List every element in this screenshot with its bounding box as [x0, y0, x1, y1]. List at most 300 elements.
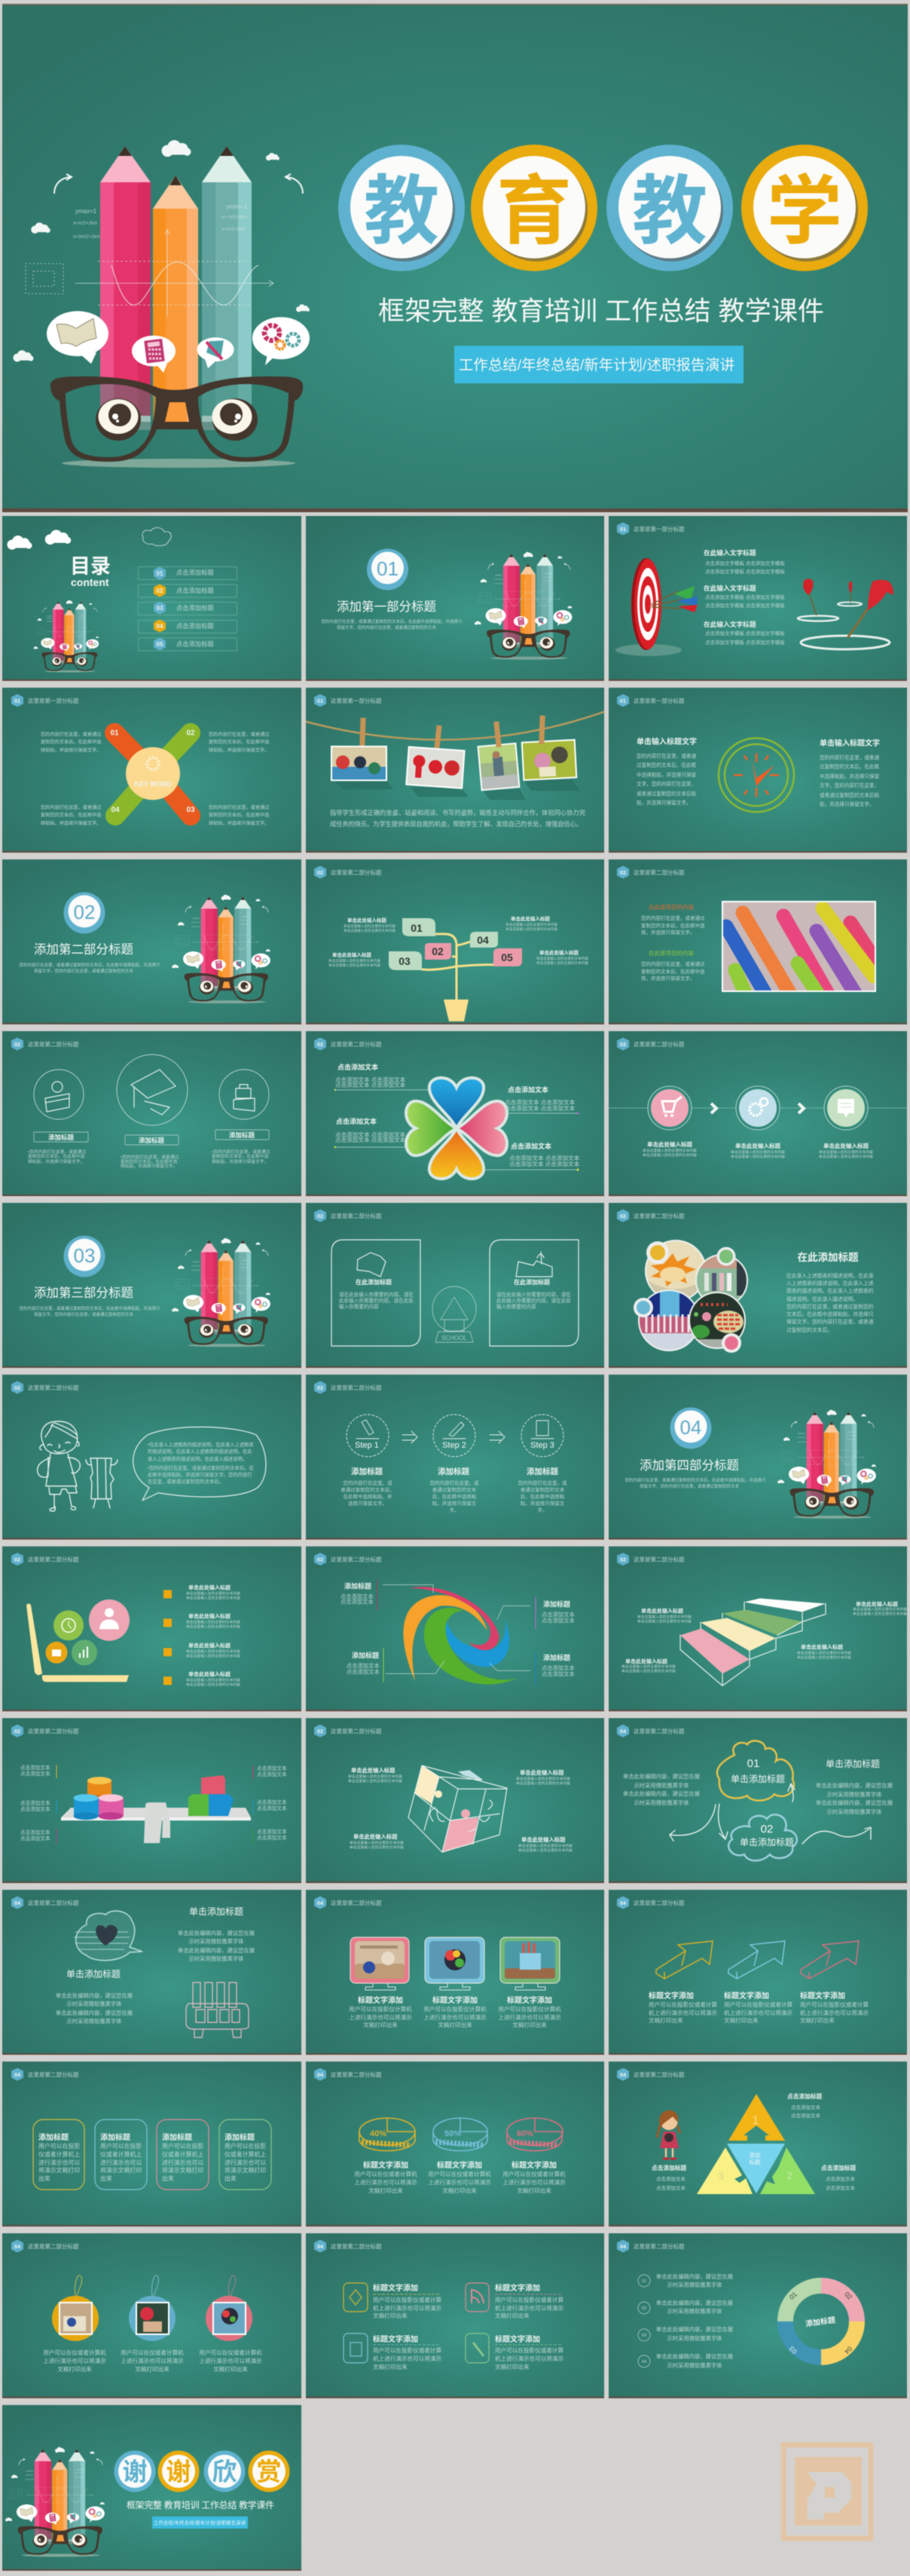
- labels: 点击添加文本: [542, 1671, 575, 1677]
- frame left: [331, 1240, 420, 1346]
- header chip: 这里是第一部分标题: [331, 697, 382, 704]
- card text: 出来: [224, 2175, 237, 2182]
- captions: 标题文字添加: [724, 1991, 769, 2001]
- title badges: 教: [632, 169, 707, 254]
- panel: ring slide: [609, 2233, 907, 2398]
- item text: 机上进行演示也可以将演示: [495, 2304, 564, 2312]
- card text: 出来: [100, 2175, 112, 2182]
- header chip: 这里是第二部分标题: [331, 1555, 382, 1563]
- chart: swirl: [403, 1587, 517, 1684]
- heading: 在此添加标题: [797, 1251, 859, 1263]
- header chip: 02: [620, 869, 626, 876]
- header chip: 01: [620, 526, 626, 533]
- illustration: pencils: [5, 2447, 105, 2557]
- card text: 添加标题: [224, 2132, 255, 2142]
- text right: [178, 1906, 255, 1962]
- text left: 过复制您的文本后，在此框: [637, 762, 697, 768]
- legend text: 单击这里输入您的主要的文本内容: [186, 1682, 240, 1687]
- diagram: four arms with center: 04: [111, 806, 120, 814]
- list icons and text: 单击此处编辑内容，建议您在展: [656, 2300, 733, 2306]
- contents list: 04: [157, 623, 163, 630]
- text column: 点击添加文字模板 点击添加文字模板: [705, 630, 785, 636]
- labels: 单击这里输入您的主要的文本内容: [819, 1154, 873, 1159]
- captions: 标题文字添加: [432, 1995, 478, 2005]
- labels: 点击添加文本 点击添加文本: [505, 1104, 576, 1112]
- labels left: 点击添加文本: [20, 1835, 50, 1842]
- labels: 点击添加文本 点击添加文本: [505, 1098, 576, 1106]
- header chip: 04: [620, 2243, 627, 2250]
- chart: ring of four segments: 02: [843, 2291, 854, 2301]
- labels right: 点击添加文本: [257, 1805, 287, 1811]
- item text: 标题文字添加: [373, 2334, 418, 2344]
- labels: 单击此处输入标题: [511, 915, 550, 922]
- icon: school snow globe: SCHOOL: [441, 1335, 467, 1341]
- description: [624, 1477, 766, 1489]
- card text: 添加标题: [162, 2132, 192, 2142]
- legend text: 单击这里输入您的主要的文本内容: [186, 1619, 240, 1625]
- chalk cloud 02: 02: [761, 1823, 773, 1836]
- chart: triangle of triangles: 2: [786, 2170, 792, 2181]
- text right: 单击此处编辑内容，建议您在展: [178, 1930, 255, 1937]
- text blocks: 择粘贴，并选择只保留文字。: [41, 747, 101, 753]
- labels left: 点击添加文本: [20, 1829, 50, 1836]
- header chip: [617, 523, 685, 535]
- photos on pegs: [331, 716, 580, 800]
- captions: [649, 1991, 869, 2024]
- header chip: 04: [620, 1728, 627, 1735]
- captions: 机上进行演示也可以将演示: [649, 2009, 718, 2016]
- labels: 点击添加标题: [821, 2164, 856, 2172]
- header chip: [11, 1553, 79, 1565]
- chart: ring of four segments: 01: [788, 2291, 799, 2301]
- description: [19, 962, 160, 974]
- labels: 点击添加文本: [511, 1142, 551, 1150]
- captions: 文稿打印出来: [363, 2021, 398, 2028]
- captions: 用户可以在投影仪或者计算: [800, 2001, 869, 2008]
- frame right: 输入你需要的内容: [496, 1303, 536, 1310]
- captions: 用户可以在仪或者计算机: [199, 2349, 262, 2356]
- text left: 示时采用微软雅黑字体: [67, 2018, 122, 2025]
- labels: 单击此处输入标题: [353, 1833, 398, 1840]
- chart: stairs: [680, 1598, 826, 1686]
- panel: balance slide: [2, 1718, 301, 1883]
- card text: 出来: [38, 2175, 50, 2182]
- tag banner: 工作总结/年终总结/新年计划/述职报告演讲: [459, 357, 734, 374]
- diagram: four arms with center: KEY WORD: [134, 780, 172, 788]
- labels: 单击此处输入标题: [641, 1607, 683, 1614]
- title badges: 育: [496, 169, 572, 254]
- item text: 标题文字添加: [495, 2283, 540, 2293]
- description: 保留文字。您的内容打在这里，或者通过复制您的文本: [34, 1311, 133, 1317]
- text column: 在此输入文字标题: [704, 548, 756, 557]
- description: 您的内容打在这里，或者通过复制您的: [786, 1303, 874, 1310]
- text left: 您的内容打在这里，或者通: [637, 752, 697, 759]
- list icons and text: 示时采用微软雅黑字体: [667, 2281, 722, 2288]
- contents list: 点击添加标题: [176, 604, 214, 612]
- list icons and text: 示时采用微软雅黑字体: [667, 2308, 722, 2315]
- item text: 文稿打印出来: [373, 2363, 408, 2370]
- header chip: 02: [620, 1556, 626, 1563]
- header chip: 02: [317, 1213, 323, 1219]
- text blocks: 复制您的文本后，在此框中选: [209, 739, 269, 745]
- outline cards: [33, 2120, 271, 2190]
- rope: [306, 712, 604, 740]
- header chip: 这里是第二部分标题: [28, 1555, 79, 1563]
- illustration: pencils: [172, 895, 270, 1003]
- text right: 过复制您的文本后，在此框: [820, 763, 880, 770]
- caption: 成任务的快乐。为学生提供表现自我的机会，帮助学生了解、发现自己的长处，增强自信心。: [330, 820, 582, 828]
- captions: 标题文字添加: [358, 1995, 403, 2005]
- labels: 单击此处输入标题: [856, 1601, 898, 1607]
- header chip: 这里是第二部分标题: [331, 2071, 382, 2078]
- thanks badges: 欣: [212, 2458, 237, 2486]
- step text: 后，在此框中选择粘: [432, 1493, 477, 1500]
- labels: 单击此处输入标题: [520, 1769, 564, 1776]
- card text: 将演示文稿打印: [162, 2166, 203, 2174]
- text blocks: 复制您的文本后，在此框中选: [209, 812, 269, 818]
- header chip: 这里是第二部分标题: [331, 1727, 382, 1735]
- step text: 者通过复制您的文本: [521, 1486, 565, 1493]
- captions: 用户可以在投影仪计算机: [349, 2005, 412, 2013]
- text blocks: •您的内容打在这里，或者通过: [121, 1154, 179, 1160]
- labels: [652, 2092, 856, 2191]
- header chip: [314, 1210, 382, 1222]
- header chip: 02: [317, 1384, 323, 1391]
- panel: photo circles slide: [609, 1203, 907, 1368]
- percentage labels: [370, 2129, 533, 2138]
- tag 2: [129, 2275, 176, 2341]
- panel: plant chart slide: [306, 859, 604, 1024]
- labels: 单击这里输入您的主要的文本内容: [797, 1650, 851, 1656]
- legend text: [186, 1584, 240, 1687]
- text column: 在此输入文字标题: [704, 584, 756, 592]
- header chip: [314, 2240, 382, 2252]
- header chip: 这里是第一部分标题: [634, 697, 685, 704]
- text blocks: •您的内容打在这里，或者通过: [212, 1149, 270, 1155]
- captions: 上进行演示也可以将演示: [199, 2357, 262, 2364]
- header chip: 04: [14, 2071, 21, 2078]
- labels: 点击添加文本: [826, 2175, 856, 2182]
- description: 在此录入上述图表的描述说明。在此录: [786, 1272, 874, 1279]
- panel: key word slide: [2, 688, 301, 853]
- labels: 单击这里输入您的主要的文本内容: [350, 1840, 404, 1845]
- text blocks: [41, 731, 269, 826]
- chalk cloud 01: 01: [747, 1757, 759, 1770]
- subtitle: 框架完整 教育培训 工作总结 教学课件: [127, 2499, 274, 2510]
- tag 1: [52, 2275, 99, 2341]
- item text: 用户可以在投影仪或者计算: [495, 2296, 564, 2303]
- header chip: [617, 2068, 685, 2080]
- item text: 文稿打印出来: [373, 2312, 408, 2319]
- step text: 后，在此框中选择粘: [521, 1493, 565, 1500]
- text right: 单击此处编辑内容，建议您在展: [816, 1782, 893, 1789]
- labels: 点击添加文本: [340, 1593, 374, 1600]
- header chip: 02: [317, 1556, 323, 1563]
- bubble text: •在此录入上述图表的描述说明。在此录入上述图表: [148, 1441, 254, 1448]
- caption: [330, 809, 585, 828]
- heading: 添加第四部分标题: [640, 1458, 739, 1473]
- list icons and text: 示时采用微软雅黑字体: [667, 2362, 722, 2369]
- header chip: 这里是第二部分标题: [331, 1212, 382, 1219]
- panel: photo line slide: [306, 688, 604, 853]
- labels: 单击这里输入您的主要的文本内容: [643, 1152, 697, 1158]
- text blocks: 择粘贴，并选择只保留文字。: [209, 820, 269, 826]
- list icons and text: 02: [642, 2306, 646, 2311]
- legend text: 单击这里输入您的主要的文本内容: [186, 1649, 240, 1654]
- card text: 用户可以在投影: [100, 2142, 142, 2150]
- captions: 文稿打印出来: [57, 2365, 92, 2373]
- card text: 用户可以在投影: [38, 2142, 80, 2150]
- header chip: 这里是第二部分标题: [331, 1899, 382, 1906]
- labels: 单击这里输入您的主要的文本内容: [328, 958, 380, 963]
- labels: 点击添加文本 点击添加文本: [335, 1076, 406, 1083]
- chart: triangle of triangles: [697, 2094, 815, 2194]
- legend text: 单击这里输入您的主要的文本内容: [186, 1591, 240, 1596]
- header chip: 这里是第二部分标题: [634, 2071, 685, 2078]
- icon: school snow globe: [432, 1286, 476, 1342]
- header chip: 04: [14, 1900, 21, 1906]
- labels: 单击这里输入您的主要的文本内容: [853, 1611, 907, 1616]
- step text: 您的内容打在这里，或: [344, 1479, 392, 1486]
- text blocks: 复制您的文本后，在此框中选: [641, 968, 705, 975]
- header chip: 04: [620, 2071, 627, 2078]
- item text: 机上进行演示也可以将演示: [373, 2355, 442, 2362]
- text right: 示时采用微软雅黑字体: [827, 1791, 882, 1798]
- labels: 单击这里输入您的主要的文本内容: [348, 1774, 402, 1779]
- title badges: [338, 145, 868, 271]
- chart: triangle of triangles: 1: [753, 2114, 759, 2127]
- photo: chalk sticks: [721, 900, 877, 993]
- chart: ring of four segments: 04: [843, 2345, 854, 2355]
- description: 保留文字。您的内容打在这里，或者通过复制您的文本: [337, 624, 436, 630]
- header chip: 02: [317, 1041, 323, 1048]
- captions: [43, 2349, 262, 2373]
- labels: [334, 1063, 580, 1170]
- text blocks: [28, 1149, 270, 1169]
- titled boxes: 添加标题: [48, 1134, 74, 1141]
- card text: 仪或者计算机上: [224, 2150, 266, 2158]
- labels right: 点击添加文本: [257, 1828, 287, 1835]
- captions: 文稿打印出来: [135, 2365, 169, 2373]
- text blocks: 复制您的文本后，在此框中选: [641, 922, 705, 929]
- arrows: [711, 1103, 804, 1113]
- captions: 上进行演示也可以将演示: [349, 2013, 412, 2021]
- labels: 点击添加文本: [336, 1117, 377, 1125]
- text left: [637, 737, 697, 806]
- legend text: 单击这里输入您的主要的文本内容: [186, 1677, 240, 1683]
- captions: 用户可以在仪或者计算机: [121, 2349, 184, 2356]
- captions: 文稿打印出来: [442, 2187, 477, 2194]
- titled boxes: [34, 1130, 269, 1145]
- item text: 文稿打印出来: [495, 2312, 530, 2319]
- labels right: [253, 1765, 287, 1844]
- icon: dart target: [615, 558, 698, 656]
- header chip: [617, 1725, 685, 1737]
- text right: 示时采用微软雅黑字体: [189, 1955, 244, 1962]
- labels: 单击这里输入您的主要的文本内容: [505, 922, 557, 927]
- frame left: 在此添加标题: [356, 1278, 392, 1286]
- labels left: 点击添加文本: [20, 1805, 50, 1812]
- contents list: 01: [157, 570, 163, 577]
- step text: 贴，并选择只保留文: [521, 1500, 565, 1506]
- list icons and text: 04: [642, 2360, 646, 2364]
- panel: cover slide: [2, 4, 908, 512]
- connector line: [609, 1107, 907, 1109]
- labels: 点击添加文本: [791, 2112, 821, 2119]
- number badge: 03: [74, 1244, 95, 1267]
- panel: process circles slide: [609, 1031, 907, 1196]
- chalk cloud 01: [717, 1741, 794, 1800]
- contents list: 05: [157, 641, 163, 648]
- labels left: 点击添加文本: [20, 1764, 50, 1771]
- text right: 中选择粘贴，并选择只保留: [820, 773, 880, 780]
- labels: 点击添加文本: [542, 1617, 575, 1624]
- labels: 点击添加文本: [337, 1063, 378, 1071]
- card text: 添加标题: [100, 2132, 130, 2142]
- list icons and text: 01: [642, 2279, 646, 2284]
- frame right: 此处输入你需要的内容。请在此处: [496, 1297, 571, 1304]
- header chip: [11, 1725, 79, 1737]
- text left: 单击添加标题: [66, 1969, 121, 1979]
- header chip: 这里是第二部分标题: [28, 1899, 79, 1906]
- text blocks: 择粘贴，并选择只保留文字。: [121, 1163, 177, 1169]
- titled boxes: 添加标题: [139, 1137, 164, 1144]
- labels: 单击这里输入您的主要的文本内容: [536, 960, 588, 966]
- text left: 单击输入标题文字: [637, 737, 697, 746]
- labels: 单击此处输入标题: [539, 949, 579, 956]
- chart: plant tree: [389, 918, 522, 1021]
- bubble text: 录入上述图表的描述说明。在此录入描述说明。: [148, 1455, 247, 1462]
- chalk cloud 02: 单击添加标题: [740, 1837, 794, 1848]
- chart: plant tree: 01: [411, 922, 423, 934]
- panel: laptop slide: [2, 1546, 301, 1711]
- item text: 机上进行演示也可以将演示: [373, 2304, 442, 2312]
- header chip: 这里是第二部分标题: [634, 868, 685, 876]
- text left: 文字。您的内容打在这里，: [637, 780, 696, 787]
- labels: 点击添加文本: [542, 1611, 575, 1618]
- step text: 贴，并选择只保留文: [432, 1500, 477, 1506]
- description: 过复制您的文本后。: [786, 1326, 832, 1333]
- labels: 点击添加文本: [340, 1598, 374, 1605]
- header chip: 这里是第二部分标题: [28, 1384, 79, 1391]
- text right: [816, 1759, 893, 1815]
- header chip: 01: [317, 697, 323, 704]
- text blocks: 择粘贴，并选择只保留文字。: [28, 1158, 84, 1164]
- header chip: [617, 1038, 685, 1050]
- text left: 单击此处编辑内容，建议您在展: [56, 1992, 133, 1999]
- header chip: 这里是第二部分标题: [634, 1040, 685, 1048]
- captions: 上进行演示也可以将演示: [498, 2013, 561, 2021]
- text blocks: 在此是项目的内容: [649, 949, 694, 957]
- labels: 点击添加文本 点击添加文本: [509, 1160, 580, 1167]
- text blocks: 复制您的文本后，在此框中选: [212, 1153, 269, 1159]
- labels: [348, 1767, 573, 1853]
- panel: arrows slide: [609, 1890, 907, 2055]
- header chip: [314, 1725, 382, 1737]
- labels: 点击添加标题: [652, 2164, 686, 2172]
- captions: 标题文字添加: [649, 1991, 694, 2001]
- text left: 单击此处编辑内容，建议您在展: [623, 1790, 700, 1797]
- header chip: 02: [14, 1384, 20, 1391]
- captions: 文稿打印出来: [724, 2016, 759, 2024]
- captions: 标题文字添加: [437, 2160, 482, 2170]
- chart: four petal clover: [406, 1078, 507, 1179]
- text right: 单击输入标题文字: [820, 738, 880, 748]
- illustration: pencils: [475, 552, 572, 660]
- header chip: 这里是第二部分标题: [634, 1555, 685, 1563]
- card text: 仪或者计算机上: [100, 2150, 142, 2158]
- card text: 用户可以在投影: [224, 2142, 266, 2150]
- text left: 示时采用微软雅黑字体: [634, 1782, 689, 1789]
- captions: 上进行演示也可以将演示: [502, 2178, 566, 2186]
- process circles: [648, 1086, 868, 1130]
- icon: clock: [719, 738, 794, 812]
- text left: 示时采用微软雅黑字体: [634, 1799, 689, 1806]
- chart: plant tree: 05: [501, 951, 513, 963]
- description: 您的内容打在这里，或者通过复制您的文本后，在此框中选择粘贴，并选择只: [321, 618, 463, 624]
- text right: 或者通过复制您的文本后粘: [820, 792, 880, 798]
- captions: [349, 1995, 561, 2028]
- captions: 用户可以在投影仪或者计算: [724, 2001, 793, 2008]
- bubble text: 的描述说明。在此录入上述图表的描述说明。在此: [148, 1448, 252, 1454]
- number badge: 04: [680, 1416, 701, 1439]
- chalk cloud 02: [728, 1814, 797, 1860]
- labels right: 点击添加文本: [257, 1834, 287, 1841]
- panel: swirl slide: [306, 1546, 604, 1711]
- number badge: [367, 548, 408, 591]
- labels: 单击这里输入您的主要的文本内容: [344, 928, 395, 933]
- step text: 者通过复制您的文本后，: [340, 1486, 395, 1493]
- panel: clock slide: [609, 688, 907, 853]
- captions: 上进行演示也可以将演示: [121, 2357, 184, 2364]
- panel: section 01: [306, 516, 604, 681]
- text column: 点击添加文字模板 点击添加文字模板: [705, 568, 785, 575]
- header chip: 02: [14, 1728, 20, 1735]
- thanks badges: [115, 2451, 289, 2492]
- header chip: [314, 694, 382, 707]
- labels: 点击添加标题: [787, 2092, 822, 2100]
- text left: [623, 1773, 700, 1806]
- captions: 用户可以在投影仪计算机: [498, 2005, 561, 2013]
- header chip: [617, 1897, 685, 1909]
- labels: 单击这里输入您的主要的文本内容: [516, 1776, 570, 1781]
- thanks badges: 赏: [256, 2458, 282, 2486]
- labels right: 点击添加文本: [257, 1765, 287, 1772]
- legend markers: [163, 1590, 172, 1685]
- header chip: 这里是第二部分标题: [28, 2242, 79, 2250]
- text right: 示时采用微软雅黑字体: [189, 1938, 244, 1945]
- tag banner: [454, 346, 744, 383]
- step text: 添加标题: [438, 1467, 469, 1476]
- contents list: 03: [157, 605, 163, 612]
- tag banner: [152, 2516, 248, 2529]
- header chip: 02: [317, 1728, 323, 1735]
- text column: 点击添加文字模板 点击添加文字模板: [705, 560, 785, 566]
- labels: 单击这里输入您的主要的文本内容: [344, 923, 395, 929]
- header chip: 02: [317, 869, 323, 876]
- step circles: Step 2: [442, 1441, 466, 1450]
- labels: 单击此处输入标题: [735, 1142, 780, 1149]
- text blocks: 复制您的文本后，在此框中选: [28, 1153, 85, 1159]
- header chip: 02: [620, 1213, 626, 1219]
- captions: 文稿打印出来: [517, 2187, 551, 2194]
- card text: 将演示文稿打印: [224, 2166, 266, 2174]
- step text: 您的内容打在这里，或: [518, 1479, 567, 1486]
- icons in circles: [34, 1055, 269, 1125]
- panel: slide 目录: [2, 516, 301, 681]
- chart: balance with blocks: [61, 1775, 251, 1843]
- header chip: 这里是第二部分标题: [331, 1040, 382, 1048]
